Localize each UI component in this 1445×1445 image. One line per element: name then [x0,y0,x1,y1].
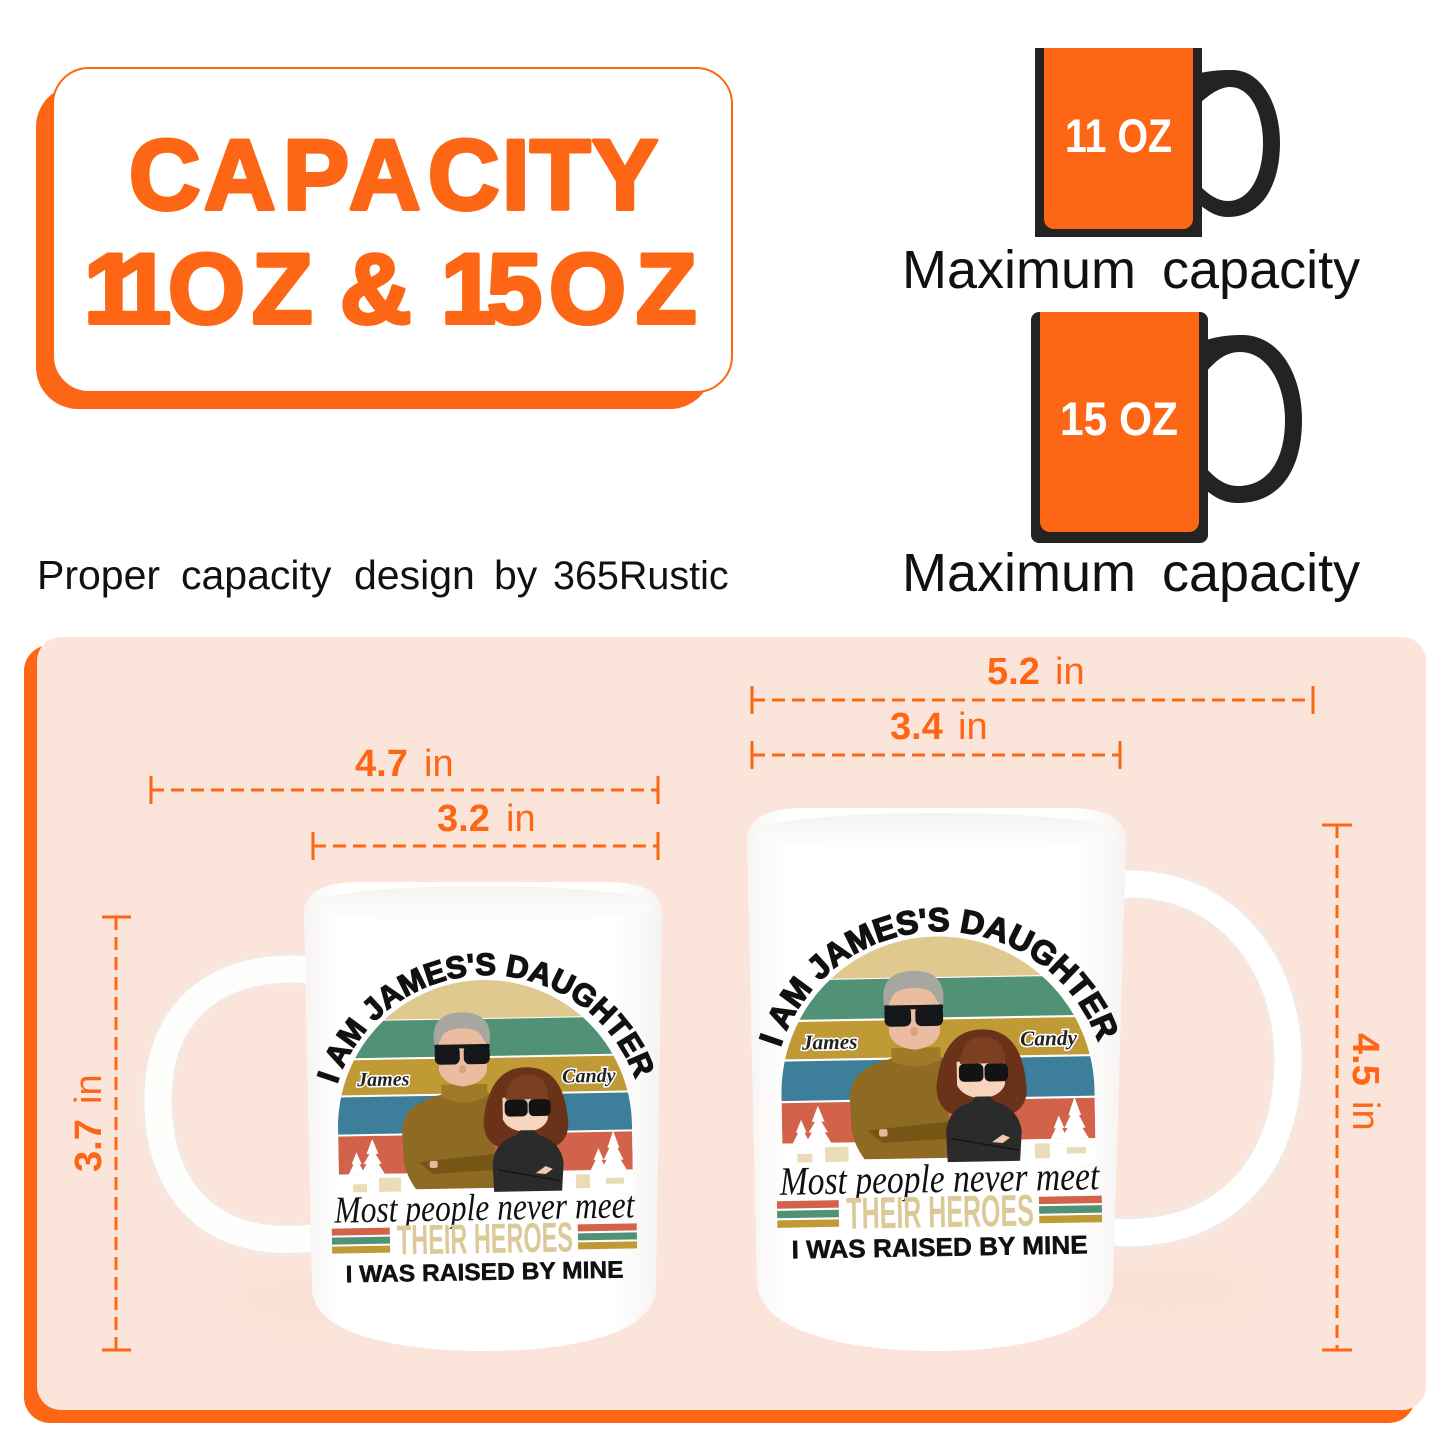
dimension: 3.4 in width [752,706,1120,769]
dimension: 5.2 in width: 5.2 [987,651,1040,693]
mug: 15 oz white mug [747,808,1305,1351]
mug print: daughter and father design: I WAS RAISED BY MINE [791,1231,1088,1265]
dimension: 3.7 in height: 3.7 [68,1119,110,1172]
mug print: slogan lines [331,1184,638,1289]
label: 11 oz maximum capacity: Maximum [902,240,1136,300]
label: 11 oz maximum capacity: capacity [1162,240,1360,300]
dimension: 3.2 in width [313,798,658,860]
caption: proper capacity design: design [354,552,475,598]
mug print: arched headline: I AM JAMES'S DAUGHTER [316,952,654,1084]
dimension: 5.2 in width: in [1055,651,1085,693]
icon: 11 oz mug: 11 OZ [1065,109,1172,162]
mug print: name labels [356,1065,616,1091]
mug: 11 oz white mug [141,882,662,1351]
mug print: daughter and father design: I AM JAMES'S DAUGHTER [758,907,1118,1046]
dimension: 4.5 in height: 4.5 [1344,1033,1386,1086]
label: 15 oz maximum capacity: capacity [1162,543,1360,603]
caption: proper capacity design: capacity [181,552,332,598]
dimension: 4.7 in width: 4.7 [355,743,408,785]
mug print: daughter and father design: Most people never meet [779,1153,1101,1204]
caption: proper capacity design: Proper [37,552,160,598]
icon: 15 oz mug: 15 OZ [1060,392,1178,445]
dimension: 5.2 in width [752,651,1313,714]
dimension: 3.7 in height [68,917,131,1350]
icon: 11 oz mug [1035,48,1280,237]
mug print: daughter and father design: James [801,1030,858,1055]
mug print: slogan lines: Most people never meet [333,1184,636,1232]
dimension: 4.7 in width [151,743,658,804]
mug print: name labels: James [356,1068,410,1091]
dimension: 4.5 in height: in [1344,1101,1386,1131]
dimension: 3.2 in width: in [506,798,536,840]
panel: dimensions background [24,637,1426,1423]
mug print: daughter and father design [338,980,633,1192]
label: 15 oz maximum capacity: Maximum [902,543,1136,603]
heading: sizes: 11OZ & 15OZ [84,233,696,344]
panel: capacity title [36,68,732,409]
dimension: 3.4 in width: in [958,706,988,748]
dimension: 4.7 in width: in [424,743,454,785]
icon: 15 oz mug [1031,312,1302,543]
dimension: 3.2 in width: 3.2 [437,798,490,840]
mug print: slogan lines: THEIR HEROES [397,1213,573,1264]
caption: proper capacity design: 365Rustic [553,554,729,598]
mug print: slogan lines: I WAS RAISED BY MINE [345,1257,624,1288]
mug print: daughter and father design: THEIR HEROES [846,1187,1034,1239]
dimension: 3.7 in height: in [68,1074,110,1104]
caption: proper capacity design: by [494,552,538,598]
mug print: daughter and father design: Candy [1020,1026,1078,1051]
mug print: name labels: Candy [562,1065,616,1088]
dimension: 3.4 in width: 3.4 [890,706,943,748]
dimension: 4.5 in height [1322,825,1386,1350]
heading: capacity: CAPACITY [129,119,658,230]
mug print: daughter and father design [758,907,1118,1265]
